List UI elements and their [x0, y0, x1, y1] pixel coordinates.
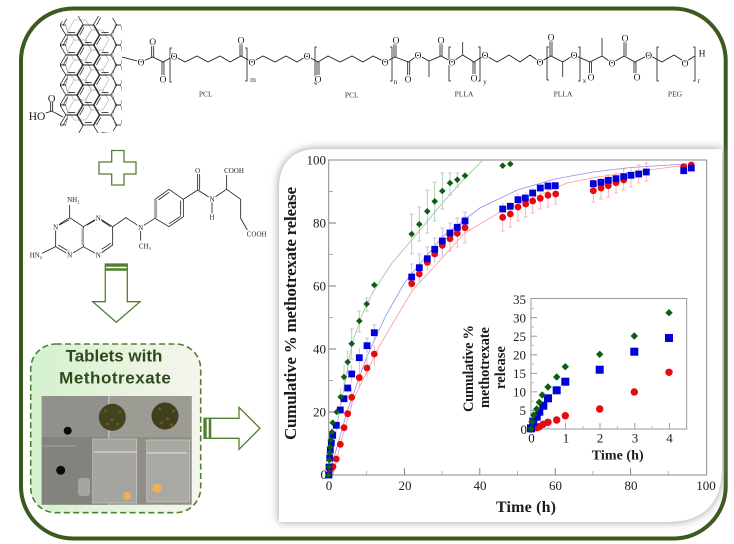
panel: chart card — [279, 149, 722, 522]
x axis labels: 20 — [398, 478, 412, 493]
inset y axis title: methotrexate — [477, 326, 493, 408]
y axis labels: 40 — [313, 342, 326, 356]
inset series: green diamonds — [527, 309, 673, 433]
polymer chain structure: O — [482, 52, 489, 62]
heading: tablets with methotrexate — [59, 347, 171, 387]
polymer chain structure: O — [682, 60, 689, 70]
polymer chain structure: PLLA — [554, 90, 573, 98]
polymer chain structure: O — [634, 74, 641, 84]
polymer chain structure: O — [449, 58, 456, 68]
polymer chain structure — [122, 34, 706, 100]
x axis labels: 40 — [474, 478, 486, 493]
polymer chain structure: n — [394, 77, 398, 86]
inset x axis labels — [528, 430, 673, 446]
inset y axis title: Cumulative % — [461, 325, 477, 412]
polymer chain structure: PLLA — [455, 90, 474, 98]
inset y axis labels: 15 — [513, 366, 526, 381]
arrow: down — [93, 264, 140, 322]
polymer chain structure: O — [645, 52, 652, 62]
polymer chain structure: x — [583, 76, 587, 85]
methotrexate molecule: N — [67, 252, 72, 260]
polymer chain structure: O — [405, 76, 412, 86]
polymer chain structure: O — [171, 52, 178, 62]
inset series: blue squares — [527, 334, 673, 432]
carbon nanotube — [29, 15, 123, 135]
polymer chain structure: PEG — [668, 90, 683, 98]
inset y axis title — [461, 325, 509, 412]
polymer chain structure: O — [438, 36, 445, 46]
y axis title: Cumulative % methotrexate release — [281, 187, 300, 440]
methotrexate molecule: HN₂ — [30, 252, 43, 260]
polymer chain structure: O — [393, 36, 400, 46]
x axis labels: 100 — [696, 478, 716, 493]
polymer chain structure: O — [138, 58, 145, 68]
methotrexate molecule: CH₃ — [139, 242, 152, 250]
y axis labels — [306, 152, 327, 482]
series: blue squares — [326, 165, 695, 478]
polymer chain structure: O — [609, 60, 616, 70]
series: green diamonds — [325, 161, 514, 478]
inset x axis labels: 4 — [666, 430, 673, 446]
inset chart: first 4 hours — [461, 292, 687, 464]
error bars — [341, 163, 648, 407]
polymer chain structure: O — [315, 76, 322, 86]
heading: tablets with methotrexate: Methotrexate — [59, 368, 171, 387]
polymer chain structure: O — [548, 34, 555, 44]
polymer chain structure: H — [699, 50, 706, 60]
x axis labels — [326, 478, 716, 493]
polymer chain structure: O — [382, 58, 389, 68]
heading: tablets with methotrexate: Tablets with — [66, 347, 162, 366]
arrow: right — [204, 407, 260, 449]
polymer chain structure: O — [160, 76, 167, 86]
inset y axis labels: 35 — [513, 292, 526, 307]
polymer chain structure: m — [250, 75, 256, 84]
carbon nanotube: HO — [29, 111, 45, 123]
x axis title: Time (h) — [496, 499, 556, 516]
series: red circles — [326, 162, 695, 478]
methotrexate molecule: O — [195, 167, 200, 175]
inset x axis labels: 2 — [597, 430, 603, 446]
methotrexate molecule: N — [96, 252, 101, 260]
y axis labels: 80 — [313, 216, 326, 230]
main release chart — [281, 152, 716, 516]
inset x axis labels: 3 — [632, 430, 638, 446]
polymer chain structure: O — [622, 34, 629, 44]
polymer chain structure: O — [537, 58, 544, 68]
x axis labels: 60 — [549, 478, 562, 493]
methotrexate molecule: H — [209, 213, 215, 221]
y axis labels: 100 — [306, 152, 326, 168]
methotrexate molecule: N — [53, 223, 58, 231]
icon: plus sign — [99, 150, 136, 185]
polymer chain structure: O — [415, 52, 422, 62]
polymer chain structure: O — [149, 38, 156, 48]
inset x axis labels: 0 — [528, 430, 535, 446]
fit curves — [329, 160, 687, 475]
y axis labels: 20 — [313, 404, 326, 420]
panel: tablets with methotrexate — [31, 344, 201, 513]
inset y axis labels: 10 — [513, 384, 526, 400]
inset y axis labels: 5 — [520, 403, 526, 418]
methotrexate molecule: NH₂ — [67, 196, 80, 204]
photo of tablets — [42, 396, 192, 505]
methotrexate molecule: COOH — [247, 230, 267, 238]
x axis labels: 80 — [624, 478, 638, 493]
inset x axis title: Time (h) — [592, 448, 644, 464]
inset y axis labels: 20 — [513, 348, 526, 362]
methotrexate molecule: COOH — [224, 167, 244, 175]
methotrexate molecule: N — [96, 214, 101, 222]
polymer chain structure: O — [249, 58, 256, 68]
polymer chain structure: y — [483, 77, 487, 86]
y axis labels: 0 — [320, 467, 327, 482]
x axis labels: 0 — [326, 478, 332, 493]
inset y axis title: release — [493, 345, 509, 389]
inset series: red circles — [527, 369, 673, 433]
polymer chain structure: O — [304, 52, 311, 62]
polymer chain structure: O — [588, 74, 595, 84]
methotrexate molecule — [30, 167, 267, 260]
inset x axis labels: 1 — [563, 430, 569, 446]
y axis labels: 60 — [313, 278, 326, 294]
inset y axis labels — [513, 292, 527, 437]
polymer chain structure: PCL — [199, 90, 213, 98]
polymer chain structure: r — [698, 76, 701, 85]
polymer chain structure: O — [571, 52, 578, 62]
methotrexate molecule: N — [138, 224, 143, 232]
polymer chain structure: O — [238, 36, 245, 46]
polymer chain structure: O — [471, 74, 478, 84]
carbon nanotube: O — [48, 94, 56, 105]
inset y axis labels: 0 — [520, 422, 527, 437]
inset y axis labels: 30 — [513, 310, 526, 326]
inset y axis labels: 25 — [513, 329, 526, 344]
methotrexate molecule: N — [209, 196, 215, 204]
polymer chain structure: PCL — [345, 90, 359, 100]
